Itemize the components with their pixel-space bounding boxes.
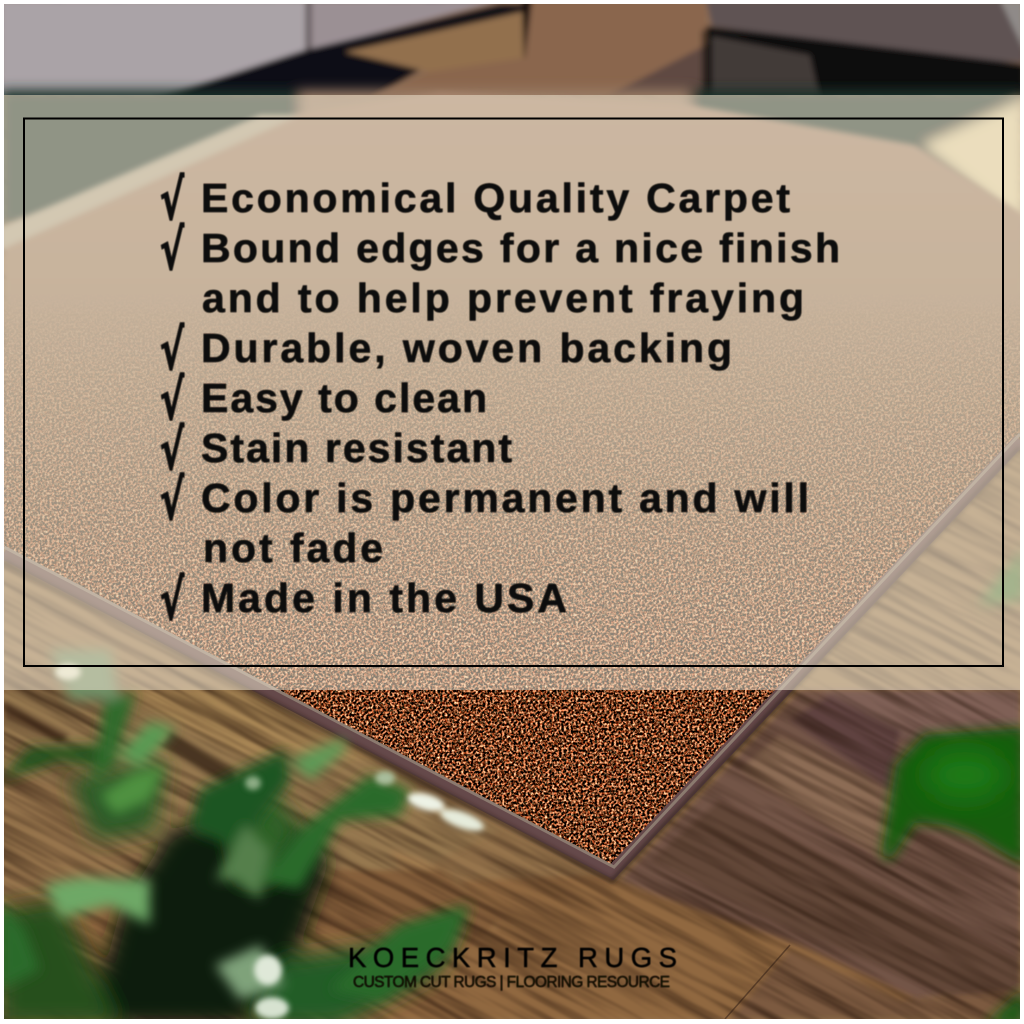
item: Durable backing: Durable, woven backing — [201, 325, 732, 371]
item: Made in the USA — [160, 568, 567, 632]
item: Easy to clean — [160, 368, 487, 432]
brand logo: KOECKRITZ RUGS — [348, 942, 677, 973]
item: Color is permanent: Color is permanent and will — [201, 475, 809, 521]
item: Durable backing — [160, 318, 732, 382]
feature checklist — [160, 168, 840, 632]
brand logo: CUSTOM CUT RUGS | FLOORING RESOURCE — [353, 974, 670, 991]
item: Bound edges: √ — [160, 218, 184, 282]
item: Made in the USA: Made in the USA — [201, 575, 567, 621]
item: Economical Quality Carpet: √ — [160, 168, 184, 232]
bound edges — [4, 440, 1020, 872]
item: Stain resistant: √ — [160, 418, 184, 482]
item: Stain resistant: Stain resistant — [201, 425, 512, 471]
item: Bound edges — [160, 218, 840, 321]
item: Easy to clean: √ — [160, 368, 184, 432]
item: Color is permanent: √ — [160, 468, 184, 532]
item: Stain resistant — [160, 418, 512, 482]
translucent cream panel — [4, 95, 1020, 690]
sofa and room at top — [0, 0, 1024, 100]
item: Color is permanent — [160, 468, 809, 571]
item: Bound edges: and to help prevent fraying — [202, 275, 804, 321]
plant: left foliage — [0, 650, 486, 1024]
item: Durable backing: √ — [160, 318, 184, 382]
item: Easy to clean: Easy to clean — [201, 375, 487, 421]
item: Economical Quality Carpet: Economical Quality Carpet — [201, 175, 790, 221]
item: Made in the USA: √ — [160, 568, 184, 632]
item: Economical Quality Carpet — [160, 168, 790, 232]
upper room under the overlay — [0, 90, 1024, 225]
black frame — [24, 118, 1003, 666]
brand logo — [348, 942, 677, 991]
plant: right leaves — [882, 548, 1024, 1024]
item: Bound edges: Bound edges for a nice finish — [201, 225, 840, 271]
item: Color is permanent: not fade — [203, 525, 383, 571]
rug — [0, 92, 1024, 890]
